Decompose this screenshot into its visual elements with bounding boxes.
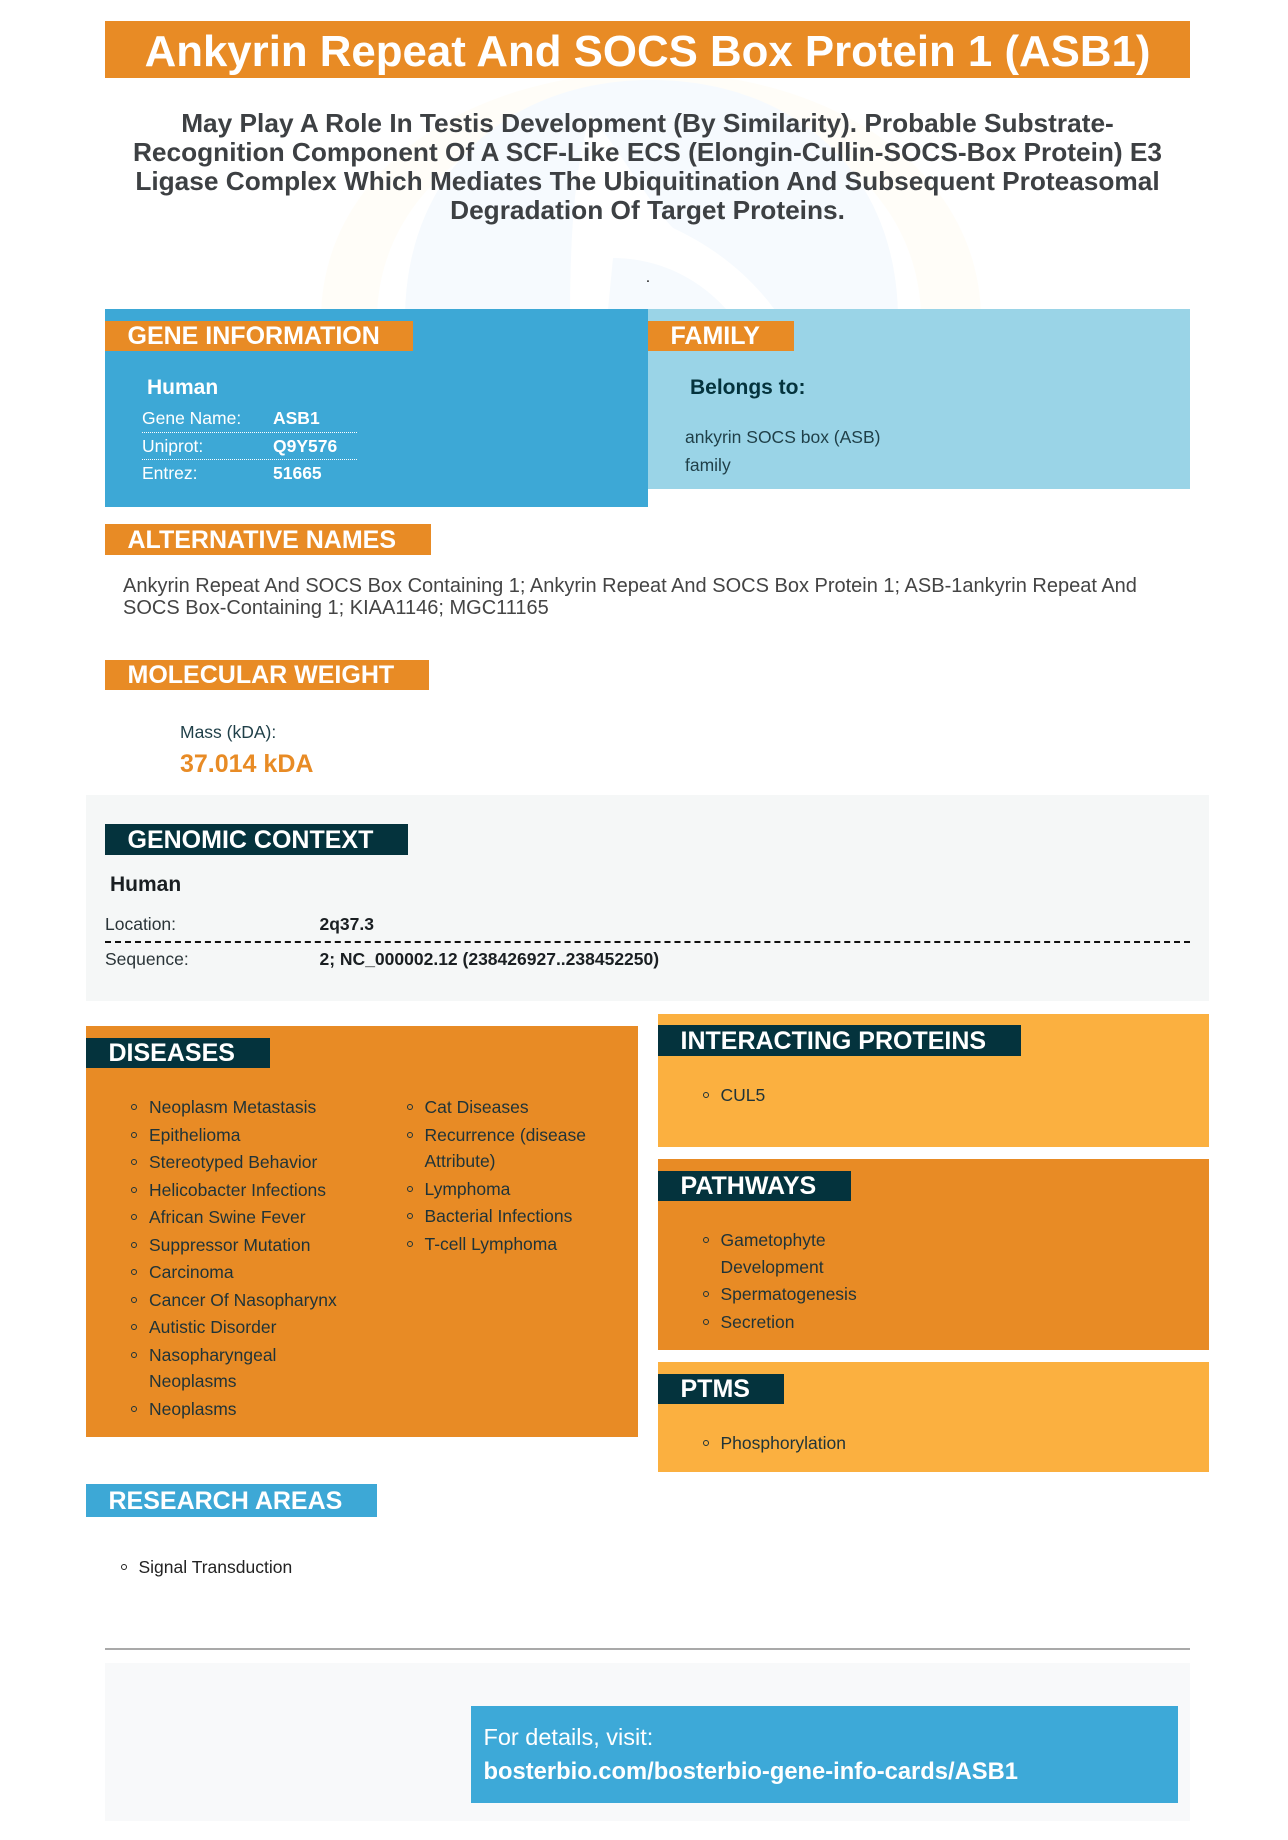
gene info table — [142, 408, 357, 483]
title: Ankyrin Repeat And SOCS Box Protein 1 (ASB1) — [145, 27, 1150, 76]
pathways list: Development — [720, 1257, 824, 1277]
diseases list column 1: Helicobacter Infections — [149, 1180, 326, 1200]
family text: family — [685, 455, 731, 475]
panel: diseases — [86, 1026, 638, 1437]
diseases list column 1: Suppressor Mutation — [149, 1235, 310, 1255]
diseases list column 2: Attribute) — [424, 1151, 496, 1171]
gene info table: ASB1 — [273, 408, 320, 428]
belongs to label: Belongs to: — [690, 376, 806, 399]
section: alternative names — [105, 524, 1137, 619]
alternative names text: Ankyrin Repeat And SOCS Box Containing 1; Ankyrin Repeat And SOCS Box Protein 1; ASB-1ankyrin Repeat And — [123, 575, 1137, 597]
heading: alternative names: ALTERNATIVE NAMES — [128, 526, 396, 554]
location row: 2q37.3 — [320, 914, 374, 934]
diseases list column 2: Recurrence (disease — [424, 1125, 586, 1145]
heading: family — [648, 321, 794, 351]
ptms list: Phosphorylation — [720, 1433, 846, 1453]
heading: family: FAMILY — [670, 322, 760, 350]
interacting proteins list: CUL5 — [720, 1085, 765, 1105]
subtitle description: Recognition Component Of A SCF-Like ECS (Elongin-Cullin-SOCS-Box Protein) E3 — [133, 137, 1162, 167]
diseases list column 1: Neoplasm Metastasis — [149, 1097, 316, 1117]
diseases list column 1: Neoplasms — [149, 1399, 237, 1419]
pathways list: Secretion — [720, 1312, 794, 1332]
panel: family — [648, 309, 1190, 489]
heading: pathways — [658, 1171, 851, 1201]
section: research areas — [86, 1484, 377, 1577]
gene info table: 51665 — [273, 463, 322, 483]
panel: ptms — [658, 1362, 1209, 1472]
heading: research areas — [86, 1484, 377, 1517]
pathways list — [703, 1230, 857, 1332]
section: molecular weight — [105, 660, 429, 778]
heading: ptms: PTMS — [680, 1375, 750, 1403]
mass value: 37.014 kDA — [180, 750, 313, 778]
gene info table: Q9Y576 — [273, 436, 337, 456]
heading: molecular weight: MOLECULAR WEIGHT — [128, 661, 394, 689]
heading: research areas: RESEARCH AREAS — [108, 1487, 342, 1515]
callout: details link — [471, 1706, 1178, 1803]
diseases list column 1: Stereotyped Behavior — [149, 1152, 317, 1172]
location row — [105, 914, 374, 934]
panel: pathways — [658, 1159, 1209, 1350]
diseases list column 1: Carcinoma — [149, 1262, 234, 1282]
dot text: . — [646, 269, 650, 286]
gene info table: Entrez: — [142, 463, 197, 483]
pathways list: Spermatogenesis — [720, 1284, 857, 1304]
diseases list column 2: Lymphoma — [424, 1179, 510, 1199]
subtitle description: Ligase Complex Which Mediates The Ubiquitination And Subsequent Proteasomal — [135, 166, 1160, 196]
heading: gene information: GENE INFORMATION — [128, 322, 380, 350]
diseases list column 1: African Swine Fever — [149, 1207, 306, 1227]
diseases list column 2: Cat Diseases — [424, 1097, 529, 1117]
panel: genomic context — [86, 795, 1209, 1001]
mass label: Mass (kDA): — [180, 722, 276, 742]
diseases list column 1: Cancer Of Nasopharynx — [149, 1290, 337, 1310]
callout: details link: For details, visit: — [484, 1724, 653, 1750]
subtitle description: Degradation Of Target Proteins. — [450, 195, 845, 225]
callout: details link: bosterbio.com/bosterbio-gene-info-cards/ASB1 — [484, 1758, 1018, 1785]
family text — [685, 427, 880, 475]
gene info table: Uniprot: — [142, 436, 203, 456]
sequence row: 2; NC_000002.12 (238426927..238452250) — [320, 949, 659, 969]
heading: genomic context: GENOMIC CONTEXT — [128, 826, 373, 854]
diseases list column 1: Nasopharyngeal — [149, 1345, 276, 1365]
heading: interacting proteins: INTERACTING PROTEINS — [680, 1027, 986, 1055]
sequence row: Sequence: — [105, 949, 189, 969]
panel: interacting proteins — [658, 1014, 1209, 1147]
location row: Location: — [105, 914, 176, 934]
diseases list column 1: Autistic Disorder — [149, 1317, 276, 1337]
heading: diseases: DISEASES — [108, 1039, 235, 1067]
watermark logo — [406, 80, 898, 309]
species label: Human — [147, 376, 218, 399]
research areas list: Signal Transduction — [138, 1557, 292, 1577]
diseases list column 1 — [131, 1097, 337, 1419]
diseases list column 1: Epithelioma — [149, 1125, 240, 1145]
sequence row — [105, 949, 659, 969]
pathways list: Gametophyte — [720, 1230, 826, 1250]
gene info table: Gene Name: — [142, 408, 241, 428]
heading: ptms — [658, 1374, 784, 1404]
diseases list column 2: T-cell Lymphoma — [424, 1234, 557, 1254]
panel: footer — [105, 1663, 1190, 1821]
panel: gene information — [105, 309, 648, 507]
alternative names text: SOCS Box-Containing 1; KIAA1146; MGC11165 — [123, 597, 549, 619]
subtitle description: May Play A Role In Testis Development (By Similarity). Probable Substrate- — [181, 108, 1114, 138]
species label: Human — [110, 873, 181, 896]
alternative names text — [123, 575, 1137, 619]
heading: pathways: PATHWAYS — [680, 1172, 816, 1200]
diseases list column 2: Bacterial Infections — [424, 1206, 572, 1226]
subtitle description — [133, 108, 1162, 225]
diseases list column 2 — [407, 1097, 586, 1254]
heading: diseases — [86, 1038, 270, 1068]
family text: ankyrin SOCS box (ASB) — [685, 427, 880, 447]
diseases list column 1: Neoplasms — [149, 1371, 237, 1391]
